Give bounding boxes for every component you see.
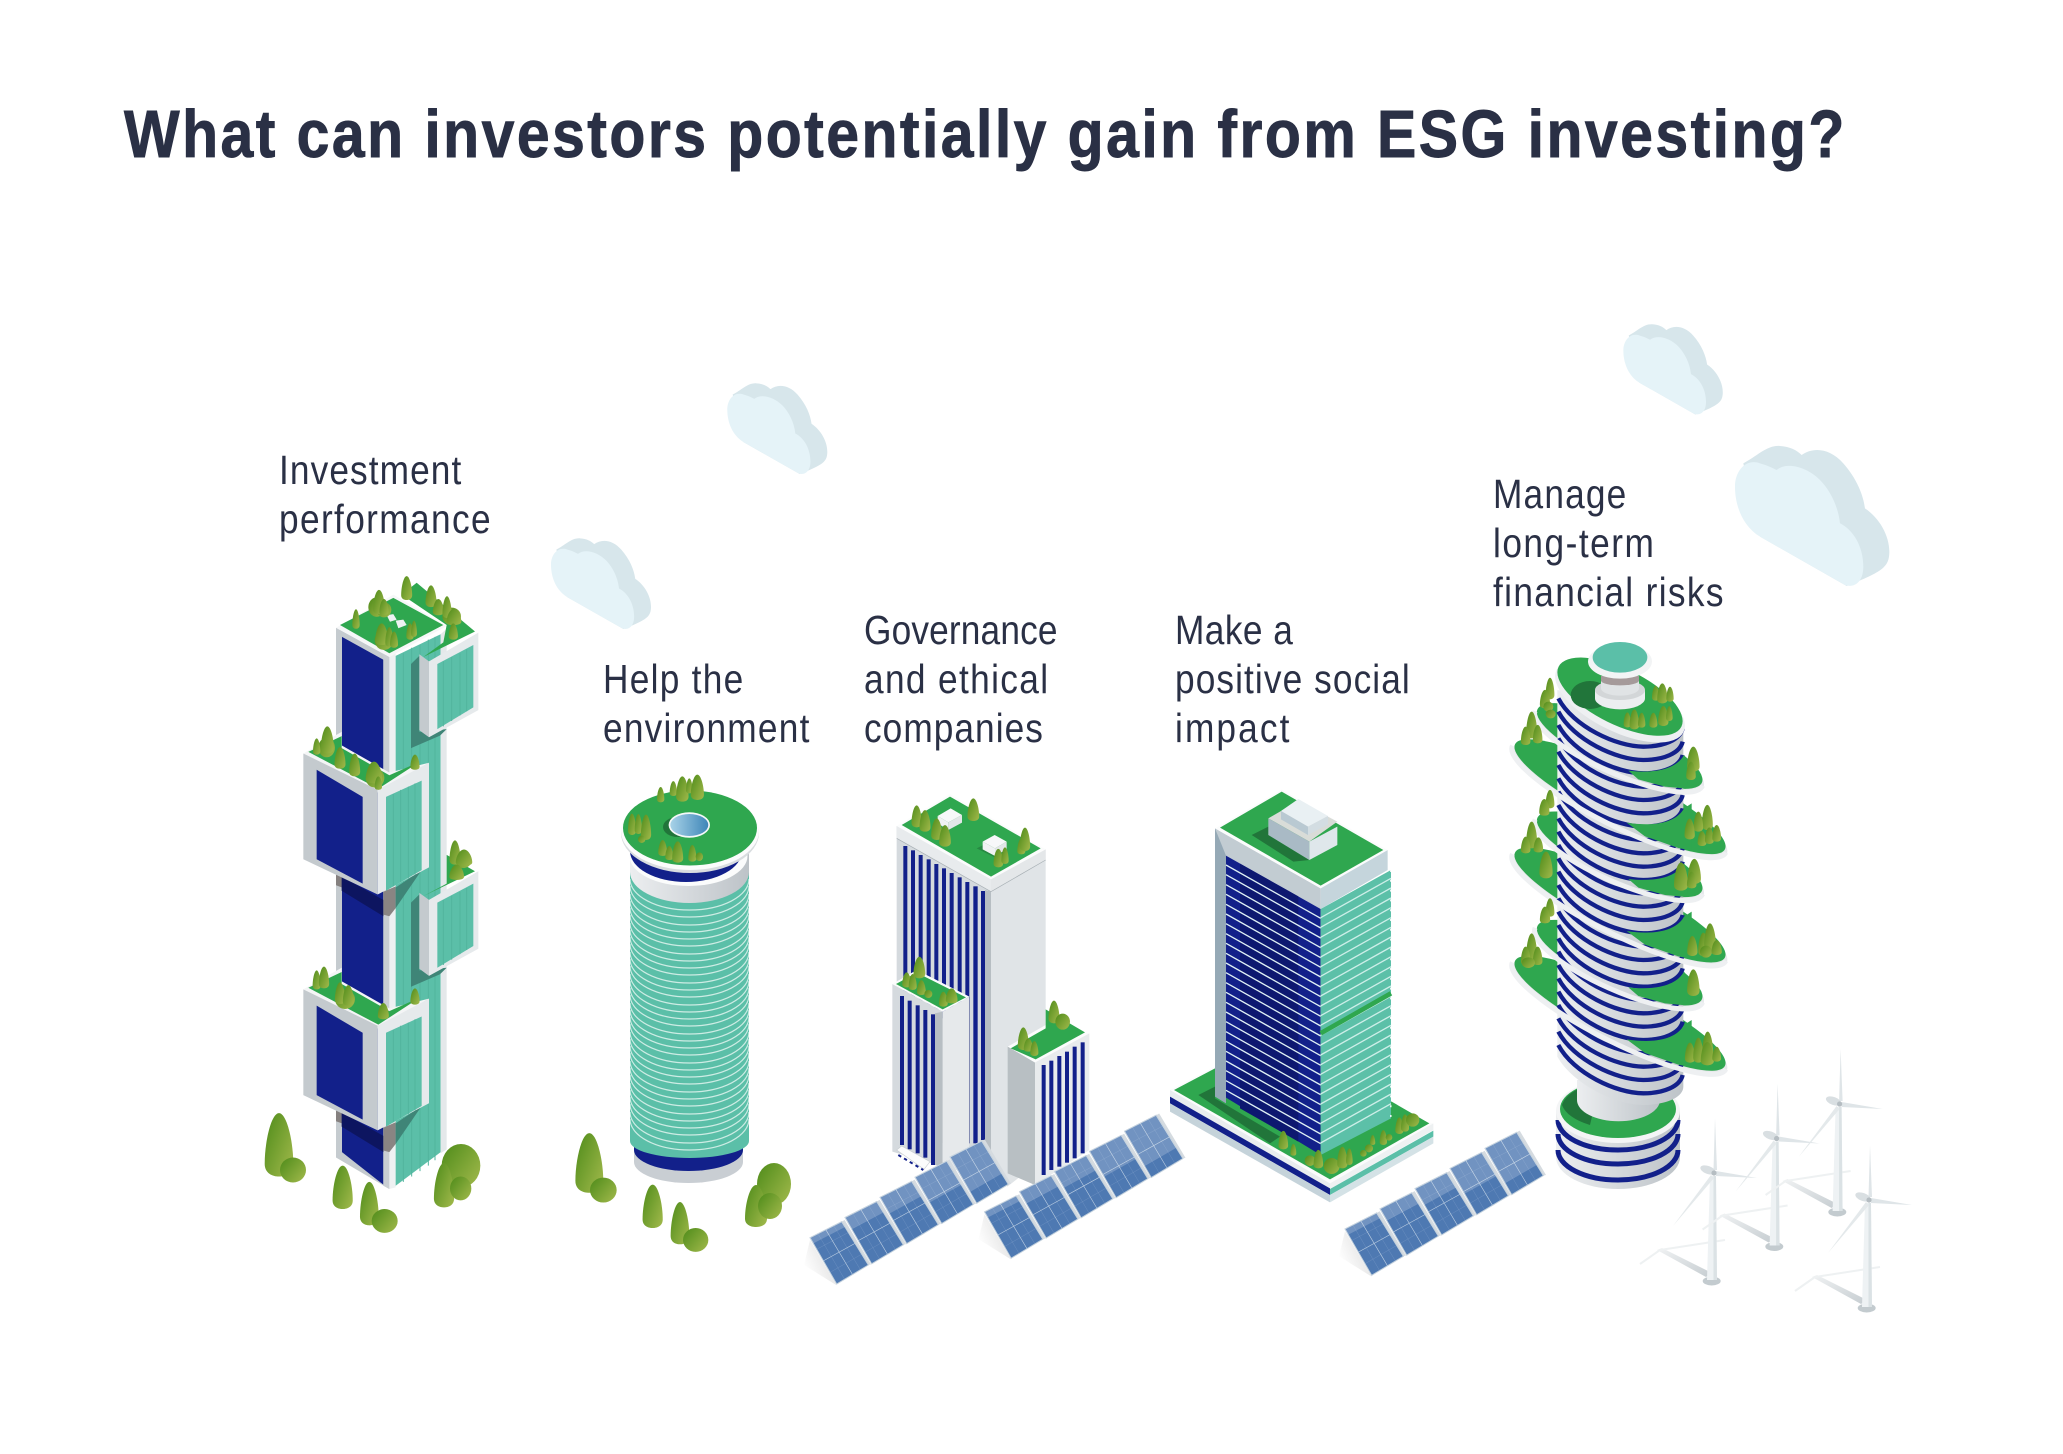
building 4: glass tower on plinth xyxy=(1170,790,1433,1202)
roof boxes xyxy=(938,808,1007,858)
tower shaft xyxy=(336,583,475,1189)
ground trees xyxy=(265,1113,480,1233)
roof xyxy=(1215,790,1388,888)
roof disc with pond xyxy=(621,790,759,873)
grey top band and blue stripe xyxy=(630,820,749,903)
ground trees xyxy=(575,1133,791,1252)
label: governance and ethical companies xyxy=(864,608,1058,752)
low left wing xyxy=(892,957,969,1173)
label: investment performance: performance xyxy=(279,497,491,543)
label: manage long-term financial risks: Manage xyxy=(1493,472,1626,518)
solar panels: array 3 xyxy=(1339,1131,1546,1277)
label: help the environment xyxy=(603,657,810,752)
wind turbine 2 xyxy=(1703,1084,1820,1251)
label: manage long-term financial risks: long-term xyxy=(1493,521,1654,567)
label: investment performance xyxy=(279,448,491,543)
striped core xyxy=(1557,690,1683,1105)
cloud: upper middle xyxy=(727,383,827,474)
garden discs, rear xyxy=(1501,687,1739,1095)
label: governance and ethical companies: and ethical xyxy=(864,657,1048,703)
building 2: cylindrical tower xyxy=(575,775,791,1252)
label: governance and ethical companies: Governance xyxy=(864,608,1058,654)
building 3: office towers xyxy=(892,794,1089,1187)
rooftop trees xyxy=(313,576,472,1019)
large box upper xyxy=(303,732,429,916)
label: make a positive social impact: impact xyxy=(1175,706,1290,752)
podium cylinder xyxy=(1556,1079,1680,1189)
tower walls xyxy=(1215,828,1391,1155)
label: governance and ethical companies: companies xyxy=(864,706,1043,752)
low right wing xyxy=(1008,1001,1089,1185)
green disc surfaces in front of the core xyxy=(1627,755,1692,1067)
label: manage long-term financial risks xyxy=(1493,472,1723,616)
upper right box xyxy=(411,633,478,748)
label: make a positive social impact: Make a xyxy=(1175,608,1293,654)
teal body with floor lines xyxy=(630,872,749,1158)
cloud: small above building 2 xyxy=(551,538,651,629)
top garden disc and cap xyxy=(1543,642,1697,760)
label: investment performance: Investment xyxy=(279,448,462,494)
building 1: stacked tower with planted boxes xyxy=(265,576,480,1233)
rooftop trees xyxy=(912,798,1030,867)
wind turbine 1 xyxy=(1640,1118,1757,1286)
label: help the environment: Help the xyxy=(603,657,743,703)
label: make a positive social impact xyxy=(1175,608,1410,752)
cloud: large top right xyxy=(1735,446,1889,586)
cloud: small top right xyxy=(1623,324,1723,414)
solar panels: array 2 xyxy=(978,1114,1185,1260)
label: help the environment: environment xyxy=(603,706,810,752)
garden disc front rims xyxy=(1500,711,1726,1093)
wind turbine 3 xyxy=(1766,1049,1883,1216)
cylinder base xyxy=(634,1141,743,1183)
label: manage long-term financial risks: financial risks xyxy=(1493,570,1723,616)
solar panels: array 1 xyxy=(804,1139,1011,1285)
roof trees xyxy=(628,775,704,863)
garden trees xyxy=(1521,678,1722,1065)
roof plant block xyxy=(1268,799,1337,860)
plinth trees xyxy=(1279,1113,1419,1174)
lower right box xyxy=(411,855,478,987)
label: make a positive social impact: positive social xyxy=(1175,657,1410,703)
wind turbine 4 xyxy=(1795,1145,1912,1312)
large box lower xyxy=(303,968,429,1152)
main tower xyxy=(897,794,1046,1187)
building 5: spiral garden tower xyxy=(1500,642,1739,1189)
title: What can investors potentially gain from ESG investing? xyxy=(124,98,1844,172)
plinth xyxy=(1170,1067,1433,1202)
